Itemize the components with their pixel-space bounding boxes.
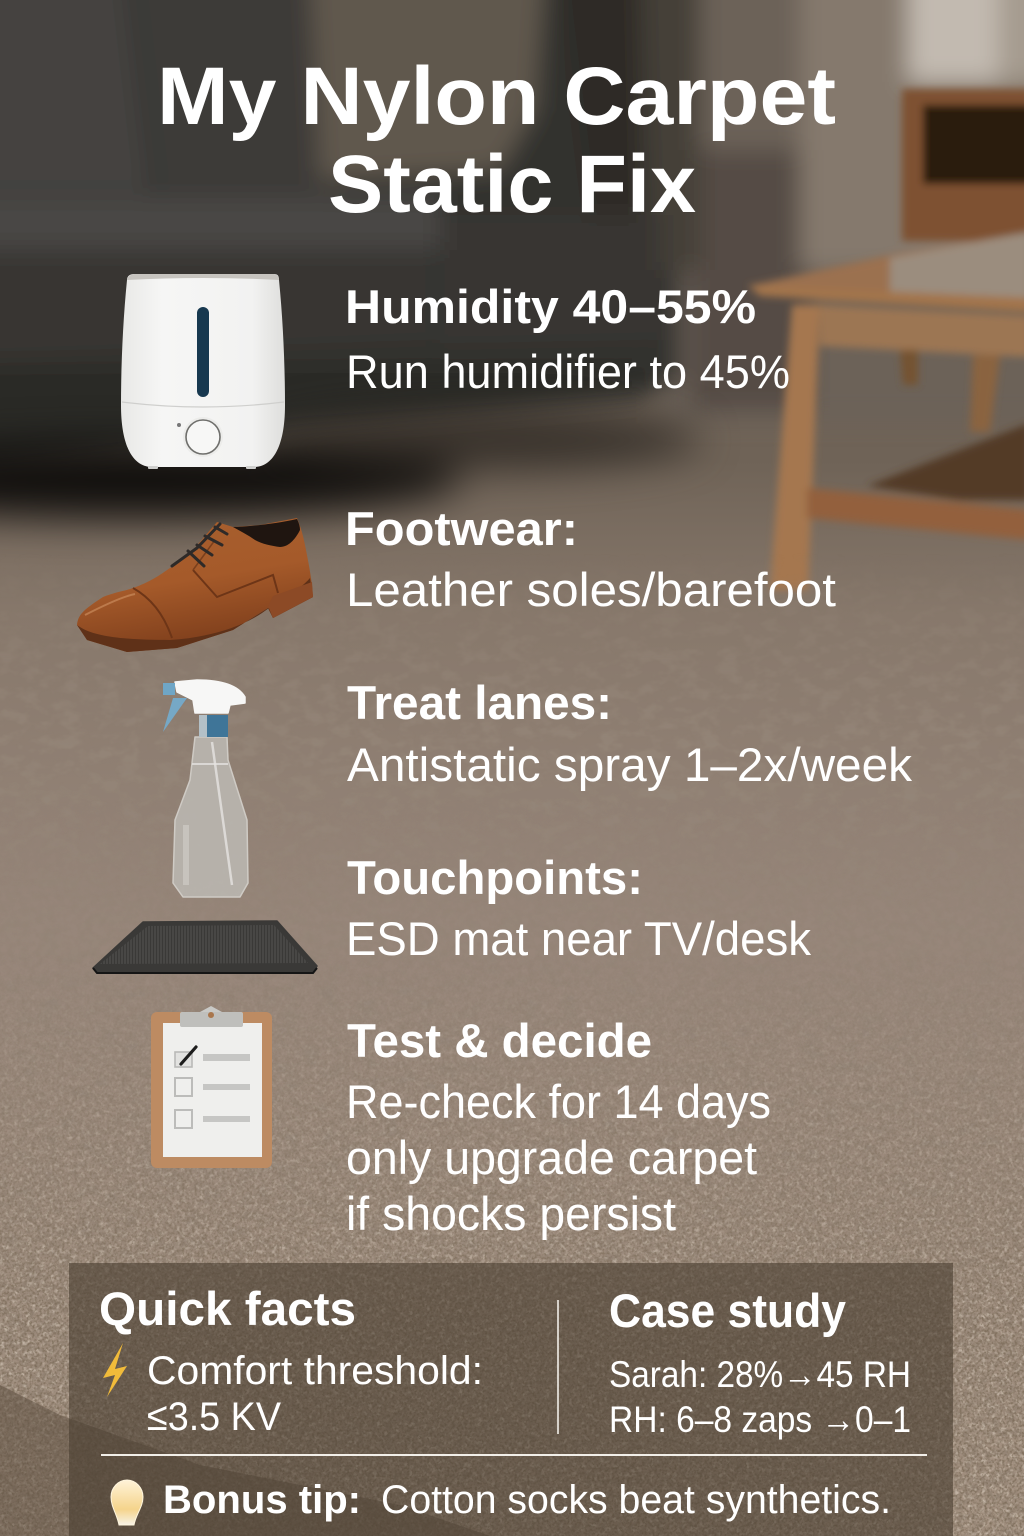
- bonus tip: [111, 1478, 891, 1525]
- background cabinet: [902, 89, 1024, 241]
- shoe laces: [172, 524, 227, 566]
- text block: touchpoints: Touchpoints:: [347, 851, 643, 904]
- text block: footwear: Leather soles/barefoot: [346, 563, 836, 616]
- text block: humidity: [345, 280, 790, 398]
- case study: [609, 1284, 911, 1440]
- bonus tip: Bonus tip:: [163, 1478, 361, 1522]
- text block: footwear: [345, 502, 836, 616]
- text block: test and decide: [346, 1014, 771, 1240]
- text block: test and decide: if shocks persist: [346, 1187, 676, 1240]
- background table: [748, 232, 1024, 310]
- text block: touchpoints: [346, 851, 811, 965]
- text block: humidity: Run humidifier to 45%: [346, 345, 790, 398]
- case study: Case study: [609, 1284, 846, 1337]
- icon: humidifier: [121, 274, 285, 469]
- background wall: [660, 0, 1024, 420]
- text block: humidity: Humidity 40–55%: [345, 280, 756, 333]
- bonus tip: Cotton socks beat synthetics.: [381, 1478, 891, 1522]
- icon: leather shoe: [77, 518, 313, 652]
- icon: spray bottle: [163, 680, 248, 897]
- title: Static Fix: [328, 139, 696, 230]
- icon: lightning bolt: [103, 1343, 127, 1397]
- text block: treat lanes: [347, 676, 912, 791]
- case study: Sarah: 28%→45 RH: [609, 1354, 911, 1395]
- quick facts: Comfort threshold:: [147, 1349, 483, 1393]
- panel: summary: [69, 1263, 953, 1536]
- icon: light bulb: [111, 1480, 143, 1525]
- title: My Nylon Carpet: [157, 51, 836, 142]
- text block: test and decide: only upgrade carpet: [346, 1131, 757, 1184]
- text block: touchpoints: ESD mat near TV/desk: [346, 912, 811, 965]
- icon: clipboard checklist: [151, 1006, 272, 1168]
- text block: test and decide: Re-check for 14 days: [346, 1075, 771, 1128]
- case study: RH: 6–8 zaps →0–1: [609, 1399, 911, 1440]
- text block: treat lanes: Antistatic spray 1–2x/week: [347, 738, 912, 791]
- background sofa: [0, 0, 680, 470]
- title: [157, 51, 836, 230]
- text block: treat lanes: Treat lanes:: [347, 676, 612, 729]
- icon: ESD mat: [93, 921, 317, 973]
- background: floor shadow under sofa: [0, 410, 700, 518]
- text block: footwear: Footwear:: [345, 502, 578, 555]
- quick facts: Quick facts: [99, 1282, 356, 1335]
- text block: test and decide: Test & decide: [347, 1014, 652, 1067]
- quick facts: ≤3.5 KV: [147, 1395, 281, 1439]
- quick facts: [99, 1282, 483, 1439]
